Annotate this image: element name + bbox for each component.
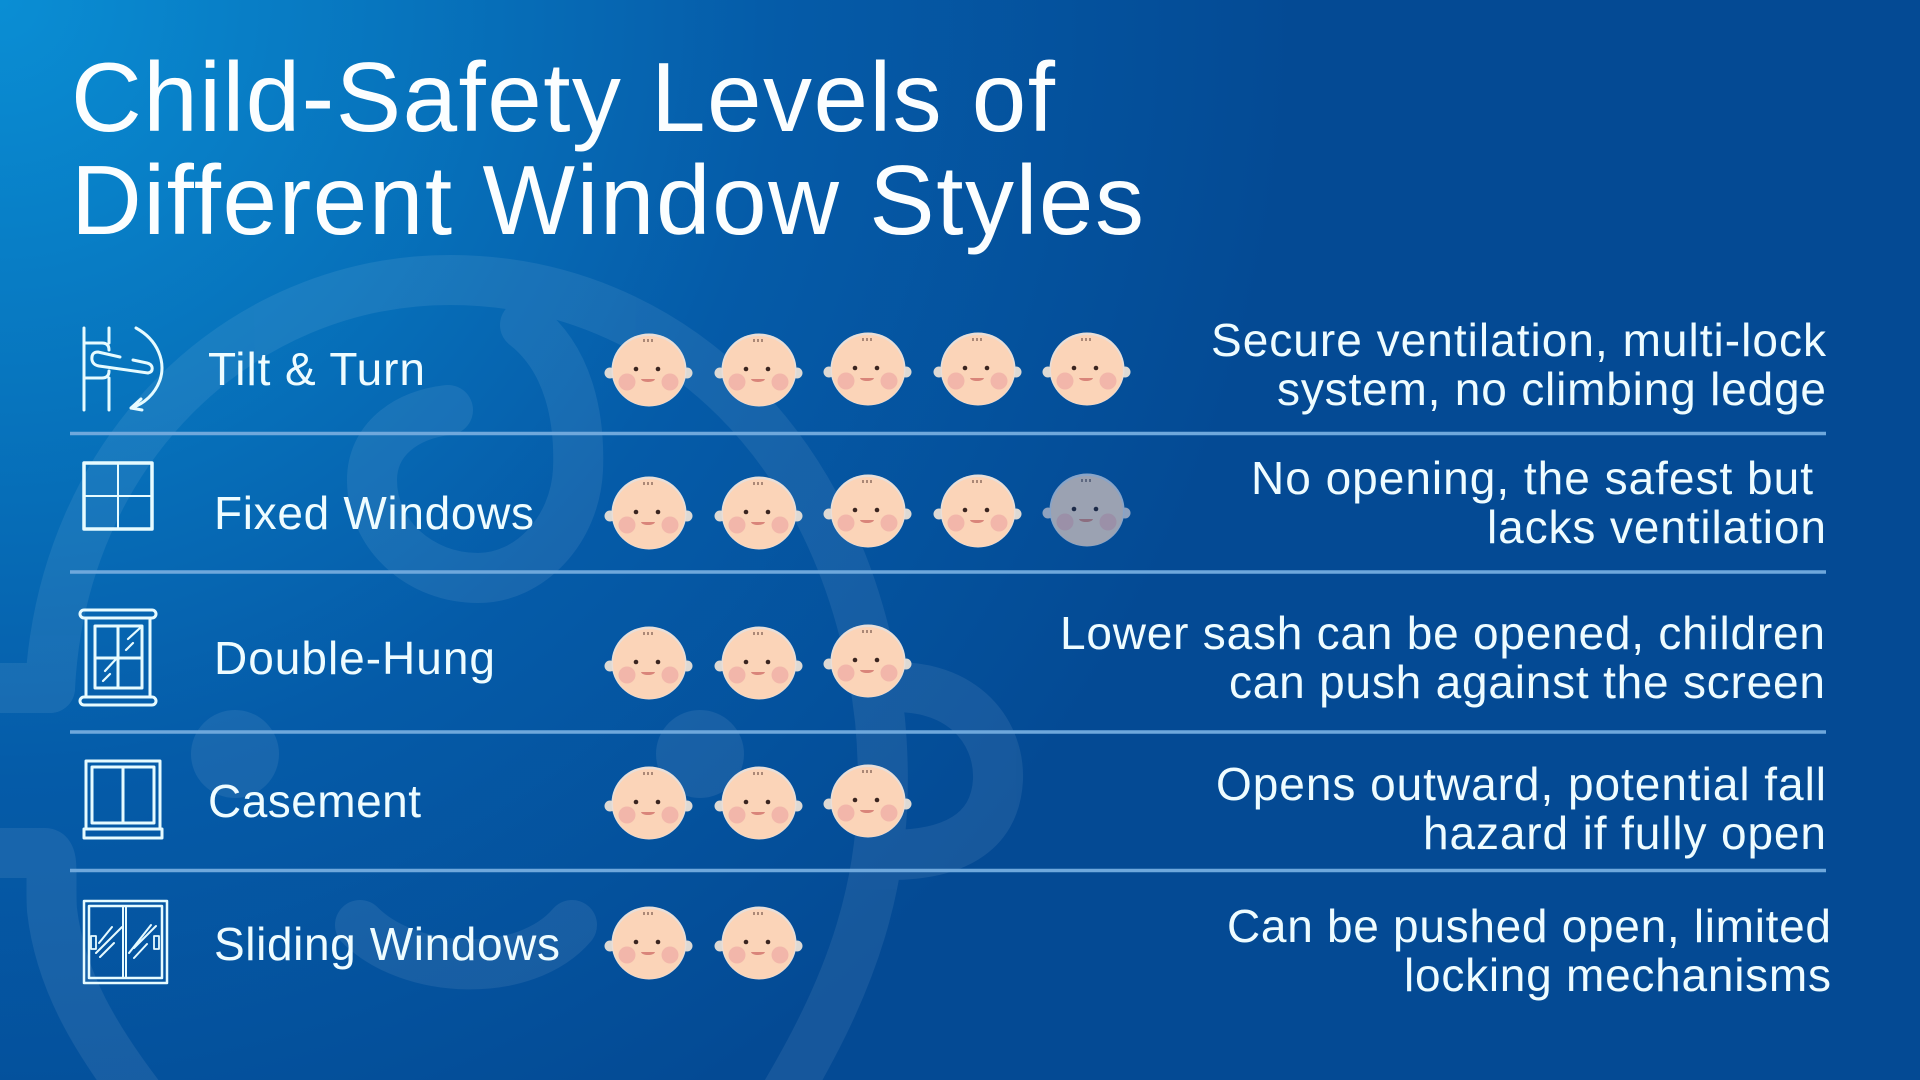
icon: tilt and turn handle — [84, 328, 162, 410]
label: Casement — [208, 775, 421, 827]
description: Opens outward, potential fall — [1216, 758, 1826, 810]
title: Different Window Styles — [71, 145, 1144, 255]
rating: 2 babies — [604, 906, 802, 980]
description — [1227, 900, 1831, 1001]
icon: sliding window — [84, 901, 167, 983]
label: Sliding Windows — [214, 918, 560, 970]
rating: 5 babies — [604, 332, 1130, 406]
description: hazard if fully open — [1423, 807, 1826, 859]
icon: casement window — [84, 761, 162, 838]
background watermark: baby face outline — [0, 280, 998, 1080]
row: Double-Hung — [80, 607, 1825, 708]
description: locking mechanisms — [1404, 949, 1831, 1001]
description: system, no climbing ledge — [1277, 363, 1826, 415]
rating: 4 of 5 babies — [604, 474, 1130, 550]
title — [71, 42, 1144, 255]
rating: 3 babies — [604, 764, 912, 840]
label: Tilt & Turn — [208, 343, 425, 395]
label: Double-Hung — [214, 632, 495, 684]
rating: 3 babies — [604, 624, 912, 700]
description: can push against the screen — [1229, 656, 1825, 708]
row: Fixed Windows — [84, 452, 1826, 553]
description — [1211, 314, 1827, 415]
icon: double-hung window — [80, 610, 156, 705]
row: Tilt & Turn — [84, 314, 1827, 415]
description: Can be pushed open, limited — [1227, 900, 1831, 952]
row: Sliding Windows — [84, 900, 1831, 1001]
description: Secure ventilation, multi-lock — [1211, 314, 1827, 366]
description: lacks ventilation — [1487, 501, 1826, 553]
label: Fixed Windows — [214, 487, 534, 539]
icon: fixed window — [84, 463, 152, 529]
description: Lower sash can be opened, children — [1060, 607, 1825, 659]
description: No opening, the safest but — [1251, 452, 1813, 504]
title: Child-Safety Levels of — [71, 42, 1056, 152]
description — [1060, 607, 1825, 708]
description — [1216, 758, 1826, 859]
description — [1251, 452, 1826, 553]
row: Casement — [84, 758, 1826, 859]
